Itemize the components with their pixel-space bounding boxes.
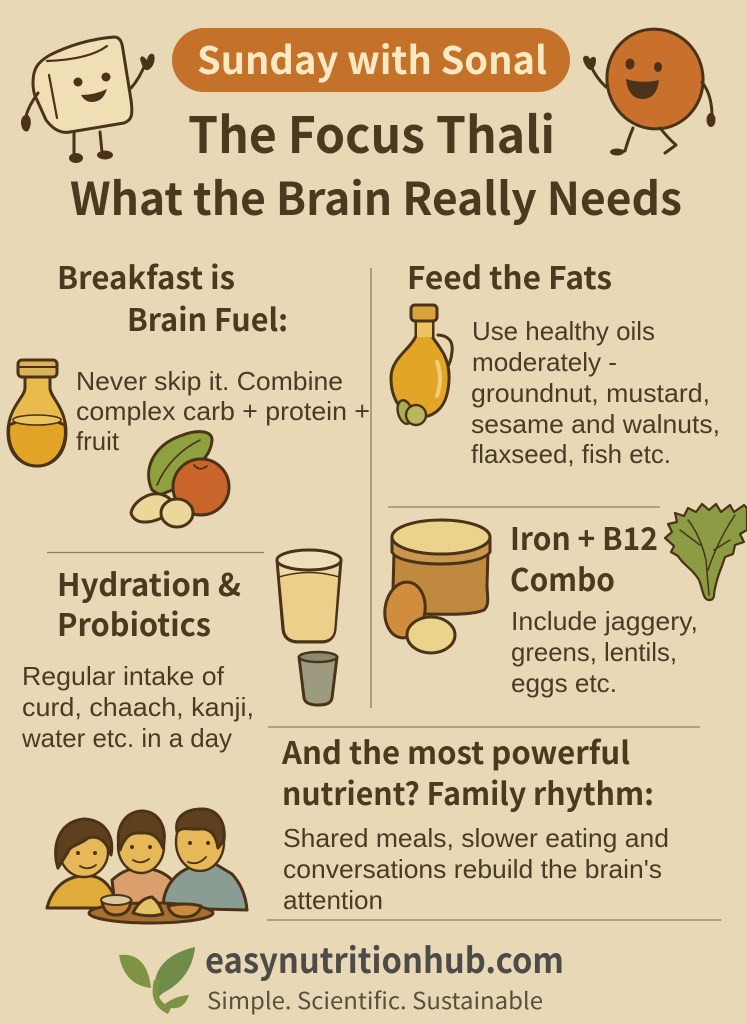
icon: juice bottle bbox=[8, 360, 66, 466]
text: family advice: attention bbox=[283, 885, 383, 915]
heading: Feed the Fats: Feed the Fats bbox=[407, 253, 612, 298]
text: breakfast advice bbox=[76, 366, 370, 456]
text: iron advice bbox=[511, 606, 698, 698]
heading: family rhythm: And the most powerful bbox=[281, 728, 630, 773]
title: The Focus Thali bbox=[188, 96, 555, 168]
icon: family sharing a meal bbox=[47, 809, 247, 923]
icon: oil bottle bbox=[391, 305, 452, 425]
footer: website name: easynutritionhub.com bbox=[205, 933, 564, 984]
text: hydration advice: Regular intake of bbox=[22, 661, 225, 691]
icon: jaggery sack with eggs bbox=[381, 520, 490, 653]
text: family advice: Shared meals, slower eating and bbox=[283, 823, 669, 853]
text: fats advice bbox=[471, 316, 720, 469]
text: fats advice: moderately - bbox=[472, 347, 617, 377]
section: family rhythm bbox=[47, 728, 669, 923]
heading: family rhythm: nutrient? Family rhythm: bbox=[282, 769, 654, 814]
icon: small glass of water bbox=[299, 652, 337, 705]
text: breakfast advice: Never skip it. Combine bbox=[76, 366, 343, 396]
heading: Breakfast is Brain Fuel bbox=[57, 253, 288, 340]
heading: Hydration & Probiotics: Probiotics bbox=[57, 600, 211, 645]
text: iron advice: Include jaggery, bbox=[511, 606, 698, 636]
icon: fruit and nuts bbox=[131, 432, 229, 527]
section: iron and B12 bbox=[381, 504, 747, 698]
heading: Iron + B12 Combo bbox=[510, 514, 658, 600]
icon: leafy greens bbox=[665, 504, 747, 600]
text: family advice bbox=[283, 823, 669, 915]
section: breakfast bbox=[8, 253, 370, 527]
text: fats advice: flaxseed, fish etc. bbox=[471, 439, 671, 469]
text: breakfast advice: fruit bbox=[76, 426, 120, 456]
text: hydration advice bbox=[21, 661, 254, 753]
heading: family rhythm bbox=[281, 728, 654, 814]
footer: tagline: Simple. Scientific. Sustainable bbox=[207, 982, 543, 1016]
text: fats advice: groundnut, mustard, bbox=[471, 378, 710, 408]
heading: Iron + B12 Combo: Iron + B12 bbox=[510, 514, 658, 559]
badge: Sunday with Sonal: Sunday with Sonal bbox=[197, 30, 547, 85]
text: fats advice: sesame and walnuts, bbox=[471, 409, 720, 439]
heading: Hydration & Probiotics bbox=[57, 560, 241, 645]
text: breakfast advice: complex carb + protein + bbox=[76, 396, 370, 426]
text: hydration advice: water etc. in a day bbox=[21, 723, 232, 753]
text: fats advice: Use healthy oils bbox=[472, 316, 655, 346]
footer logo: leaf bbox=[119, 947, 195, 1014]
subtitle: What the Brain Really Needs bbox=[70, 163, 682, 228]
icon: smiling paneer cube character bbox=[21, 37, 155, 163]
text: hydration advice: curd, chaach, kanji, bbox=[22, 692, 254, 722]
icon: smiling orange ball character bbox=[583, 20, 716, 156]
section: hydration bbox=[21, 550, 341, 753]
heading: Hydration & Probiotics: Hydration & bbox=[57, 560, 241, 605]
text: iron advice: greens, lentils, bbox=[511, 637, 677, 667]
heading: Iron + B12 Combo: Combo bbox=[510, 555, 615, 600]
text: iron advice: eggs etc. bbox=[511, 668, 617, 698]
section: fats bbox=[391, 253, 720, 469]
heading: Breakfast is Brain Fuel: Brain Fuel: bbox=[127, 295, 288, 340]
heading: Breakfast is Brain Fuel: Breakfast is bbox=[57, 253, 235, 298]
icon: glass of buttermilk bbox=[277, 550, 341, 642]
text: family advice: conversations rebuild the brain's bbox=[283, 854, 662, 884]
